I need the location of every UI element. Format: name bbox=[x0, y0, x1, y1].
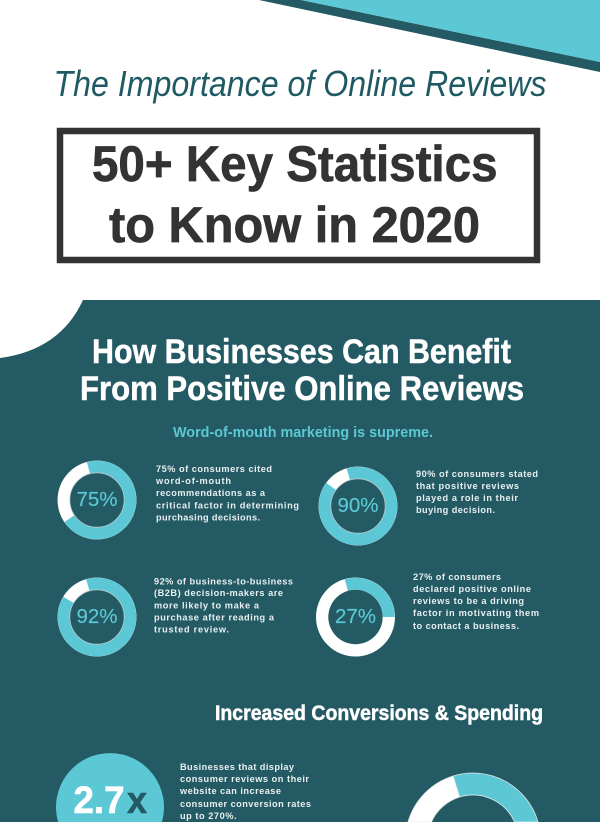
donut: partial bottom ring bbox=[408, 773, 538, 822]
text: 27% stat: 27% of consumers bbox=[413, 572, 501, 582]
text: 90% stat: buying decision. bbox=[416, 505, 495, 515]
text: 27% stat: reviews to be a driving bbox=[413, 596, 524, 606]
text: 92% stat: trusted review. bbox=[154, 624, 229, 634]
text: 27% stat: declared positive online bbox=[413, 584, 531, 594]
title box: 50+ Key Statistics bbox=[92, 136, 498, 192]
text: 75% stat: purchasing decisions. bbox=[156, 512, 260, 522]
text: conversion stat: Businesses that display bbox=[180, 762, 295, 772]
text: 75% stat: recommendations as a bbox=[156, 488, 266, 498]
text: conversion stat: consumer conversion rates bbox=[180, 799, 311, 809]
donut: 92% bbox=[56, 576, 138, 658]
text: 90% stat: 90% of consumers stated bbox=[416, 469, 538, 479]
text: conversion stat: website can increase bbox=[179, 786, 281, 796]
title box bbox=[60, 131, 537, 260]
text: conversion stat: consumer reviews on their bbox=[180, 774, 309, 784]
text: conversion stat bbox=[179, 762, 311, 821]
text: 92% stat bbox=[154, 576, 293, 634]
text: 92% stat: 92% of business-to-business bbox=[154, 576, 293, 586]
donut: 27% bbox=[314, 576, 397, 658]
donut: 75% bbox=[56, 459, 138, 541]
section subheading: Word-of-mouth marketing is supreme. bbox=[173, 425, 433, 441]
text: 27% stat: to contact a business. bbox=[413, 621, 519, 631]
section heading: conversions: Increased Conversions & Spending bbox=[215, 702, 543, 725]
top corner shape bbox=[259, 0, 600, 72]
donut: 92%: 92% bbox=[76, 605, 118, 628]
text: 75% stat: word-of-mouth bbox=[155, 476, 231, 486]
donut: 27%: 27% bbox=[335, 605, 376, 628]
title box: to Know in 2020 bbox=[109, 197, 480, 253]
donut: 75%: 75% bbox=[76, 488, 118, 511]
text: 75% stat: critical factor in determining bbox=[156, 500, 299, 510]
text: conversion stat: up to 270%. bbox=[180, 811, 236, 821]
donut: 90% bbox=[316, 464, 400, 548]
text: 90% stat: played a role in their bbox=[416, 493, 518, 503]
text: 92% stat: more likely to make a bbox=[154, 600, 260, 610]
text: 90% stat bbox=[416, 469, 538, 515]
subtitle: The Importance of Online Reviews bbox=[54, 63, 546, 104]
donut: 90%: 90% bbox=[337, 494, 379, 517]
section heading: From Positive Online Reviews bbox=[80, 370, 524, 408]
text: 75% stat: 75% of consumers cited bbox=[156, 464, 272, 474]
badge: 2.7x: x bbox=[127, 780, 147, 822]
text: 75% stat bbox=[155, 464, 299, 522]
text: 92% stat: purchase after reading a bbox=[154, 612, 275, 622]
text: 27% stat: factor in motivating them bbox=[413, 608, 539, 618]
text: 92% stat: (B2B) decision-makers are bbox=[154, 588, 283, 598]
text: 27% stat bbox=[413, 572, 539, 631]
section heading: How Businesses Can Benefit bbox=[92, 333, 511, 371]
section heading bbox=[80, 333, 524, 408]
badge: 2.7x: 2.7 bbox=[74, 780, 124, 822]
badge: 2.7x bbox=[56, 753, 164, 822]
text: 90% stat: that positive reviews bbox=[416, 481, 519, 491]
panel: benefits bbox=[0, 300, 600, 822]
